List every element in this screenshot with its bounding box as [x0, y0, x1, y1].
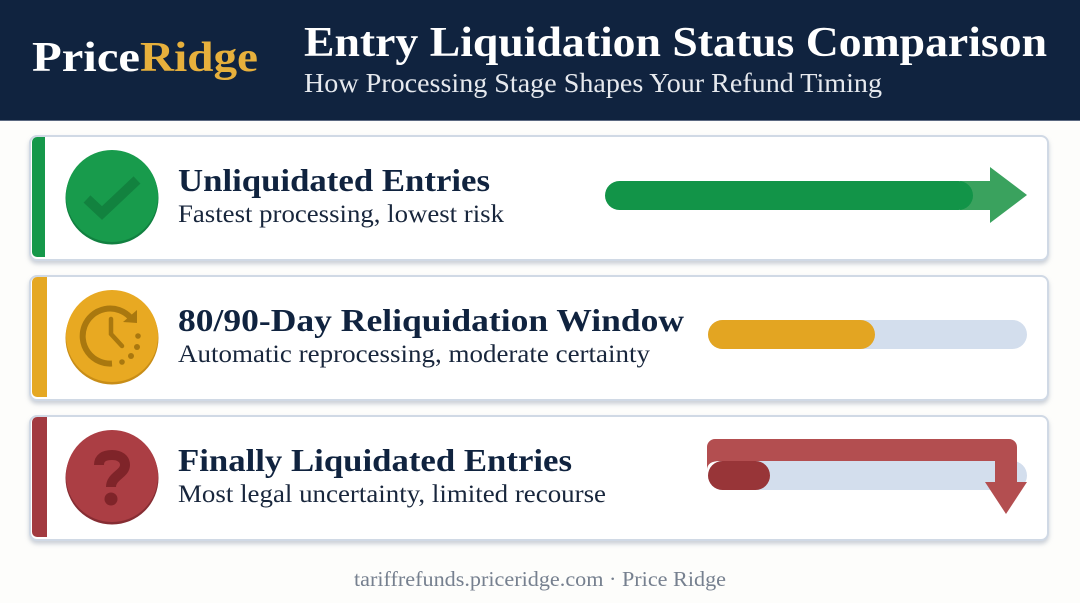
arrow bar: green [605, 167, 1027, 223]
description: Fastest processing, lowest risk [178, 201, 505, 228]
subtitle: How Processing Stage Shapes Your Refund Timing [304, 68, 882, 98]
progress bar: amber [708, 320, 1027, 349]
description: Automatic reprocessing, moderate certainty [178, 341, 651, 368]
panel: reliquidation window [30, 276, 1048, 400]
accent bar: green [32, 137, 45, 257]
progress bar with downward arrow: red [707, 439, 1027, 514]
icon: clock with refresh arrow [66, 290, 158, 384]
description: Most legal uncertainty, limited recourse [178, 481, 606, 508]
accent bar: amber [32, 277, 47, 397]
logo [32, 35, 258, 81]
header band [0, 0, 1080, 121]
heading: Unliquidated Entries [178, 162, 490, 198]
heading: 80/90-Day Reliquidation Window [178, 302, 684, 338]
icon: question mark [66, 430, 158, 524]
logo: Ridge [140, 35, 258, 81]
accent bar: red [32, 417, 47, 537]
heading: Finally Liquidated Entries [178, 442, 572, 478]
panel: finally liquidated entries [30, 416, 1048, 540]
title: Entry Liquidation Status Comparison [304, 20, 1047, 66]
footer: tariffrefunds.priceridge.com · Price Ridge [354, 567, 726, 591]
icon: check mark [66, 150, 158, 244]
panel: unliquidated entries [30, 136, 1048, 260]
logo: Price [32, 35, 140, 81]
